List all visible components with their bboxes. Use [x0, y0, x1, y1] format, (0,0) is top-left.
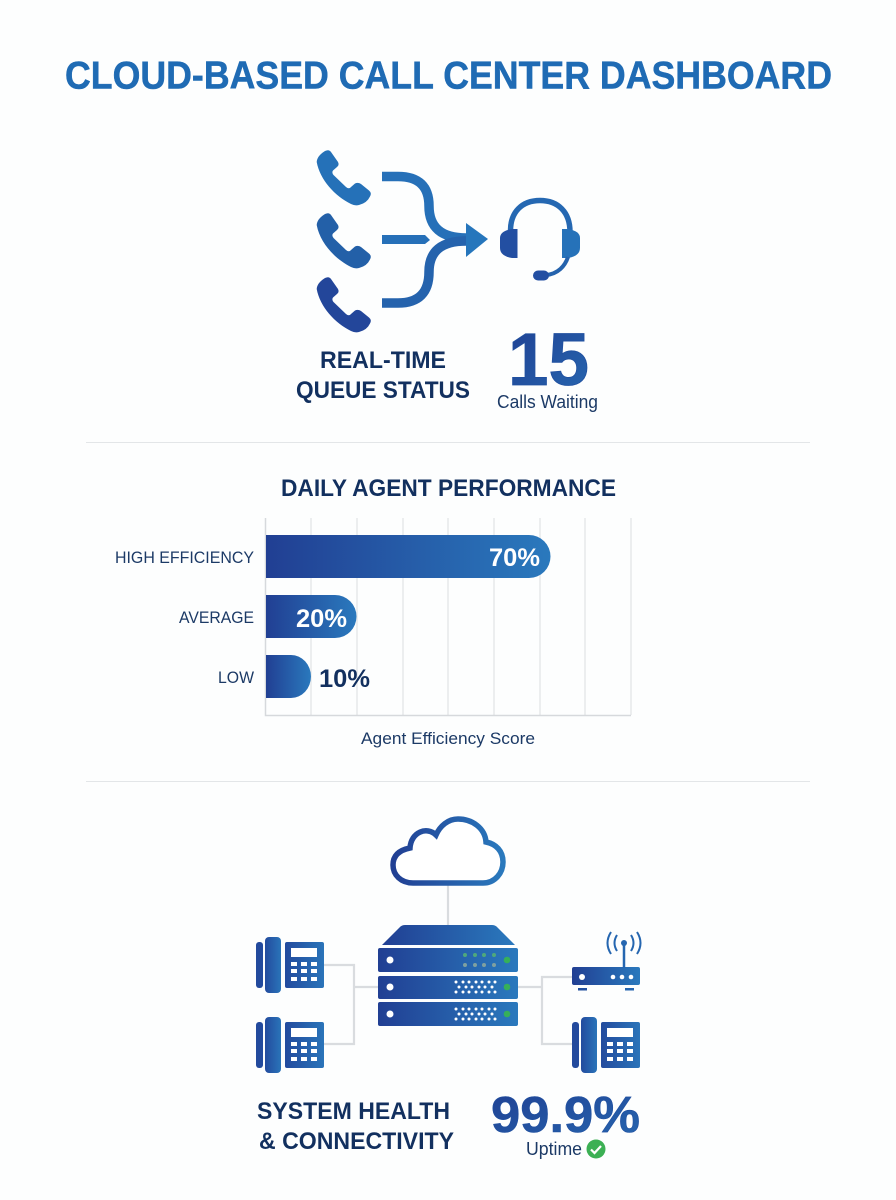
bar: low 10%: 10% — [319, 665, 370, 693]
heading: daily agent performance: DAILY AGENT PERFORMANCE — [281, 475, 616, 502]
stat: calls waiting: 15 — [508, 318, 589, 401]
bar: low 10%: LOW — [218, 668, 254, 687]
icon: cloud — [393, 819, 503, 883]
bar: high efficiency 70%: 70% — [489, 544, 540, 572]
icon: three incoming phones — [317, 150, 371, 332]
title: CLOUD-BASED CALL CENTER DASHBOARD — [65, 54, 832, 98]
bar: high efficiency 70%: HIGH EFFICIENCY — [115, 548, 254, 567]
heading: system health and connectivity — [257, 1098, 454, 1155]
icon: green check — [586, 1140, 606, 1158]
chart: agent efficiency bars — [115, 518, 631, 748]
icon: agent headset — [500, 200, 580, 280]
axis label: Agent Efficiency Score — [361, 730, 535, 748]
bar: average 20%: AVERAGE — [179, 608, 254, 627]
icon: desk phone top left — [256, 937, 324, 993]
stat: uptime: Uptime — [526, 1139, 582, 1159]
heading: system health and connectivity: & CONNECTIVITY — [259, 1128, 454, 1155]
bar: average 20%: 20% — [296, 605, 347, 633]
panel: system health and connectivity — [256, 819, 640, 1159]
bar: low 10% — [218, 655, 370, 698]
heading: real-time queue status: QUEUE STATUS — [296, 377, 470, 404]
heading: real-time queue status — [296, 347, 470, 404]
heading: real-time queue status: REAL-TIME — [320, 347, 446, 374]
panel: real-time queue status — [296, 150, 598, 412]
icon: desk phone bottom right — [572, 1017, 640, 1073]
stat: uptime: 99.9% — [491, 1086, 640, 1143]
network connection lines — [324, 884, 572, 1044]
icon: desk phone bottom left — [256, 1017, 324, 1073]
stat: calls waiting: Calls Waiting — [497, 392, 598, 412]
panel: daily agent performance — [115, 475, 631, 748]
icon: server rack — [378, 925, 518, 1026]
heading: system health and connectivity: SYSTEM HEALTH — [257, 1098, 450, 1125]
bar: average 20% — [179, 595, 356, 638]
icon: wifi router — [572, 932, 640, 990]
bar: high efficiency 70% — [115, 535, 550, 578]
arrow: calls merging into queue — [382, 176, 488, 303]
